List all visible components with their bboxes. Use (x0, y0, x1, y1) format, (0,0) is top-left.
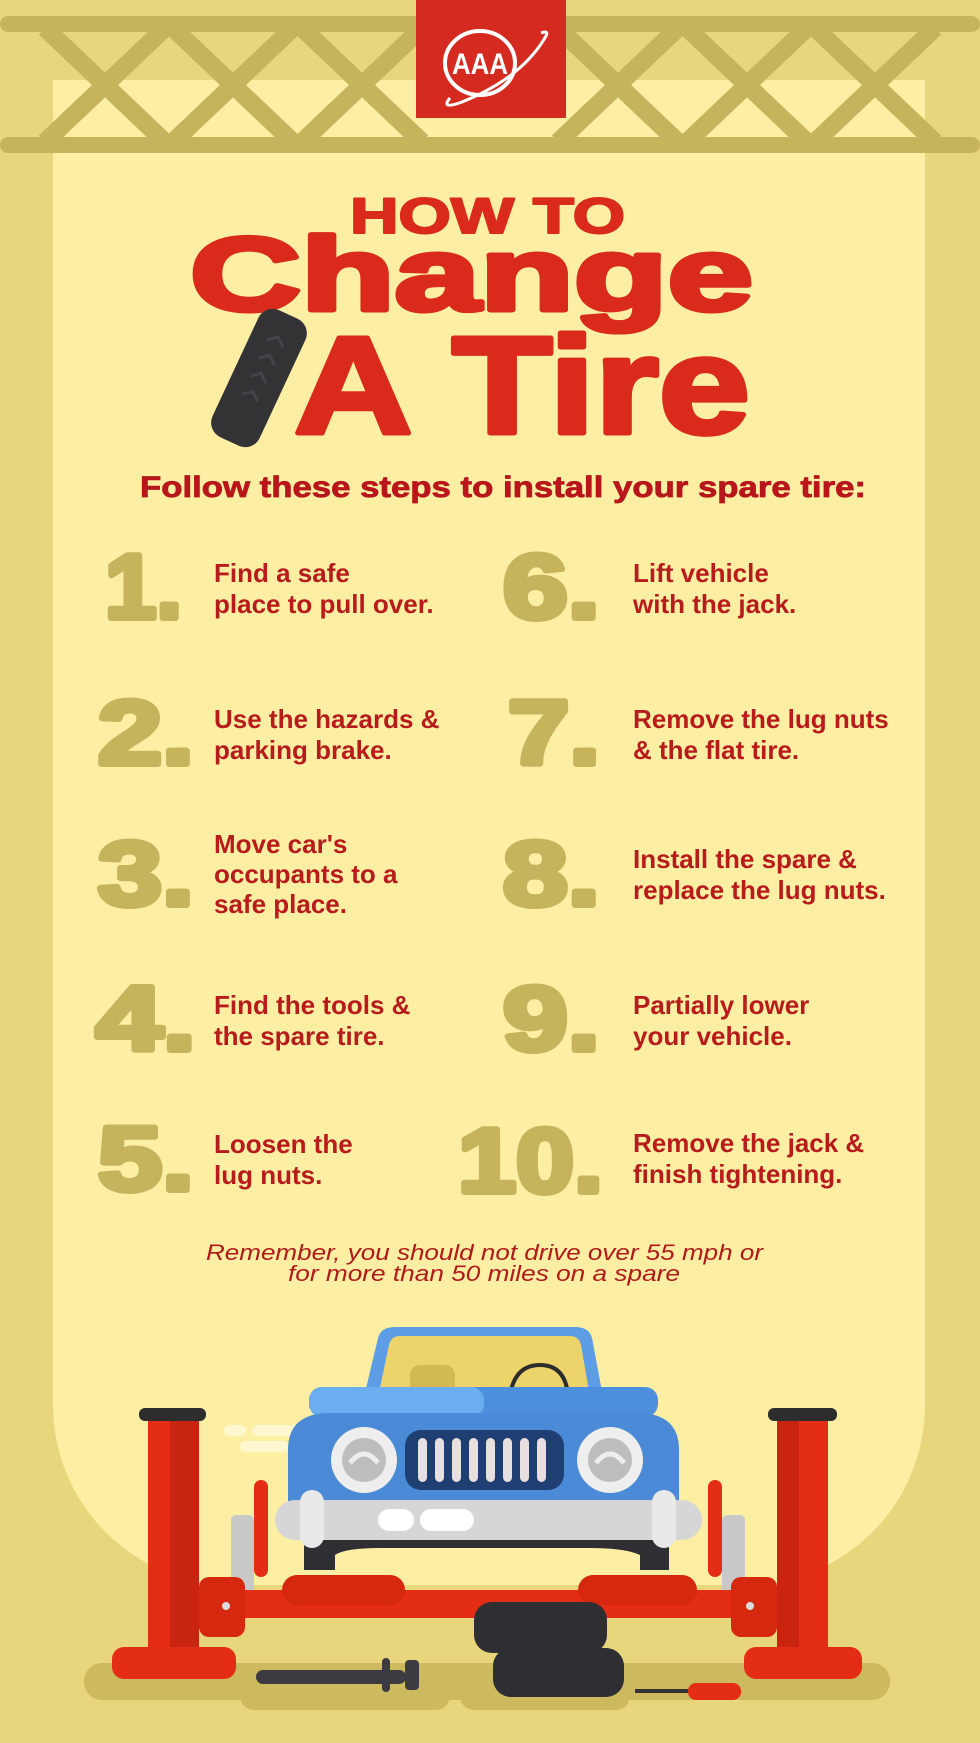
note: speed warning: for more than 50 miles on a spare (288, 1261, 680, 1286)
step 3 (98, 824, 398, 925)
step 10: finish tightening. (633, 1159, 842, 1189)
logo: AAA (416, 0, 566, 118)
windshield (364, 1327, 603, 1397)
note: speed warning: Remember, you should not drive over 55 mph or (206, 1240, 765, 1265)
step 3: Move car's (214, 829, 347, 859)
step 7: 7. (508, 683, 600, 784)
step 9 (503, 969, 809, 1070)
step 7 (508, 683, 889, 784)
logo: AAA: AAA (452, 48, 508, 81)
wheel hubs and arms (231, 1480, 745, 1600)
step 1: place to pull over. (214, 589, 434, 619)
title (190, 188, 753, 463)
step 1: Find a safe (214, 558, 350, 588)
car body (275, 1387, 702, 1570)
step 5 (98, 1109, 353, 1210)
ground shadow (84, 1663, 890, 1710)
step 2: parking brake. (214, 735, 392, 765)
step 1: 1. (105, 537, 182, 638)
step 7: & the flat tire. (633, 735, 799, 765)
step 1 (105, 537, 434, 638)
illustration: car on lift (84, 1327, 890, 1710)
icon: tire (206, 304, 312, 452)
step 8 (503, 824, 886, 925)
step 10: Remove the jack & (633, 1128, 864, 1158)
step 10: 10. (458, 1111, 603, 1212)
step 3: occupants to a (214, 859, 398, 889)
step 9: Partially lower (633, 990, 809, 1020)
steps: right column (458, 537, 889, 1212)
step 4 (96, 969, 410, 1070)
step 2: 2. (98, 683, 194, 784)
step 6 (503, 537, 796, 638)
step 4: Find the tools & (214, 990, 410, 1020)
step 2 (98, 683, 439, 784)
step 8: Install the spare & (633, 844, 857, 874)
step 5: Loosen the (214, 1129, 353, 1159)
step 7: Remove the lug nuts (633, 704, 889, 734)
speed lines (224, 1425, 300, 1452)
step 5: 5. (98, 1109, 194, 1210)
lift posts (112, 1408, 862, 1679)
spare tires (474, 1602, 624, 1697)
truss beam (0, 16, 980, 153)
step 4: 4. (96, 969, 196, 1070)
panel: inner light background (53, 80, 925, 1585)
title: HOW TO (350, 188, 625, 244)
subtitle: Follow these steps to install your spare tire: (140, 471, 866, 504)
step 9: your vehicle. (633, 1021, 792, 1051)
lift bar and pads (199, 1575, 777, 1637)
step 6: 6. (503, 537, 600, 638)
steps: left column (96, 537, 439, 1210)
step 8: replace the lug nuts. (633, 875, 886, 905)
step 6: Lift vehicle (633, 558, 769, 588)
step 3: 3. (98, 824, 194, 925)
wrench (256, 1658, 419, 1692)
screwdriver (635, 1683, 741, 1700)
step 9: 9. (503, 969, 600, 1070)
step 5: lug nuts. (214, 1160, 322, 1190)
step 3: safe place. (214, 889, 347, 919)
step 10 (458, 1111, 864, 1212)
step 6: with the jack. (632, 589, 796, 619)
step 8: 8. (503, 824, 600, 925)
title: Change (190, 217, 753, 333)
step 4: the spare tire. (214, 1021, 385, 1051)
step 2: Use the hazards & (214, 704, 439, 734)
title: A Tire (294, 309, 750, 463)
